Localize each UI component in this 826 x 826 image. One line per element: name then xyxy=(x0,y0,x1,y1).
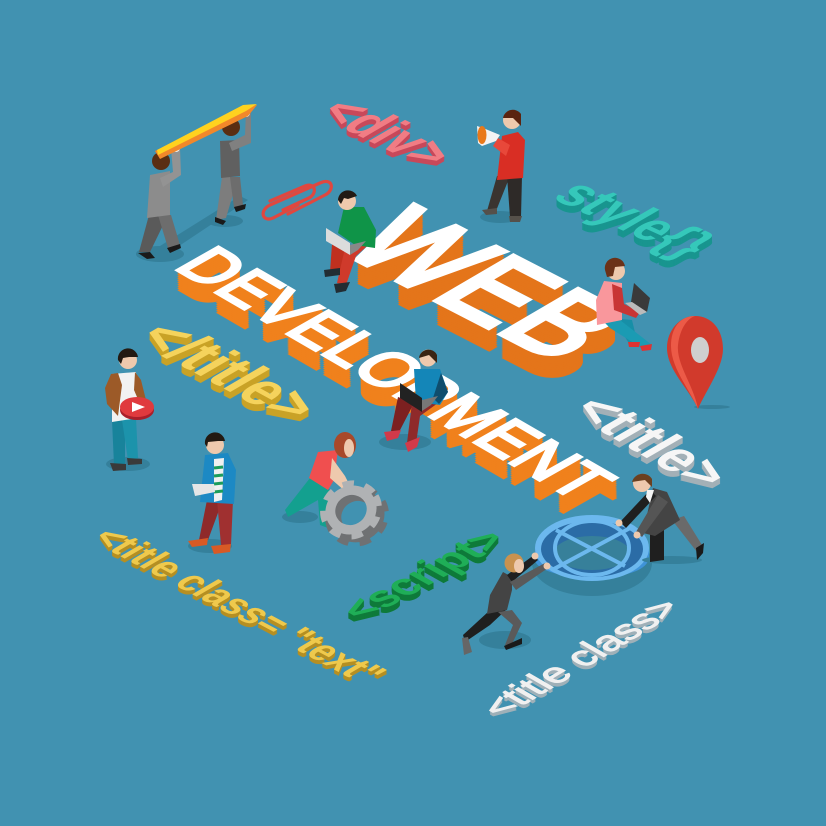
icon: gear xyxy=(315,475,394,552)
icon: giant pencil xyxy=(155,104,257,159)
code tag: title class: <title class> xyxy=(471,592,690,723)
figure: man with play button xyxy=(105,348,154,471)
code tag: closing title: </title> xyxy=(121,311,338,431)
figure: man with megaphone xyxy=(477,110,525,223)
code tag: style: style{} xyxy=(540,172,730,265)
figure: developer in pink on B xyxy=(596,258,652,351)
figure: man carrying pencil, front xyxy=(136,144,248,262)
code tag: title: <title> xyxy=(558,386,747,497)
code tag: script: <script> xyxy=(328,522,518,626)
figure: businessman pushing right xyxy=(616,474,704,564)
figure: businessman pushing left xyxy=(462,552,550,655)
figure: man with tablet xyxy=(188,432,236,554)
code tag: title class text: <title class= "text" xyxy=(81,521,397,690)
title word: DEVELOPMENT: DEVELOPMENT xyxy=(159,237,631,509)
figure: woman turning gear xyxy=(282,432,356,528)
code tag: div: <div> xyxy=(304,89,471,175)
title word: WEB: WEB xyxy=(313,191,658,378)
icon: location pin xyxy=(667,316,730,409)
icon: globe xyxy=(532,515,652,596)
icon: paperclip xyxy=(263,181,331,219)
figure: man carrying pencil, back xyxy=(207,109,251,227)
figure: developer in blue on M xyxy=(379,350,448,452)
figure: developer in green on W xyxy=(324,190,376,293)
